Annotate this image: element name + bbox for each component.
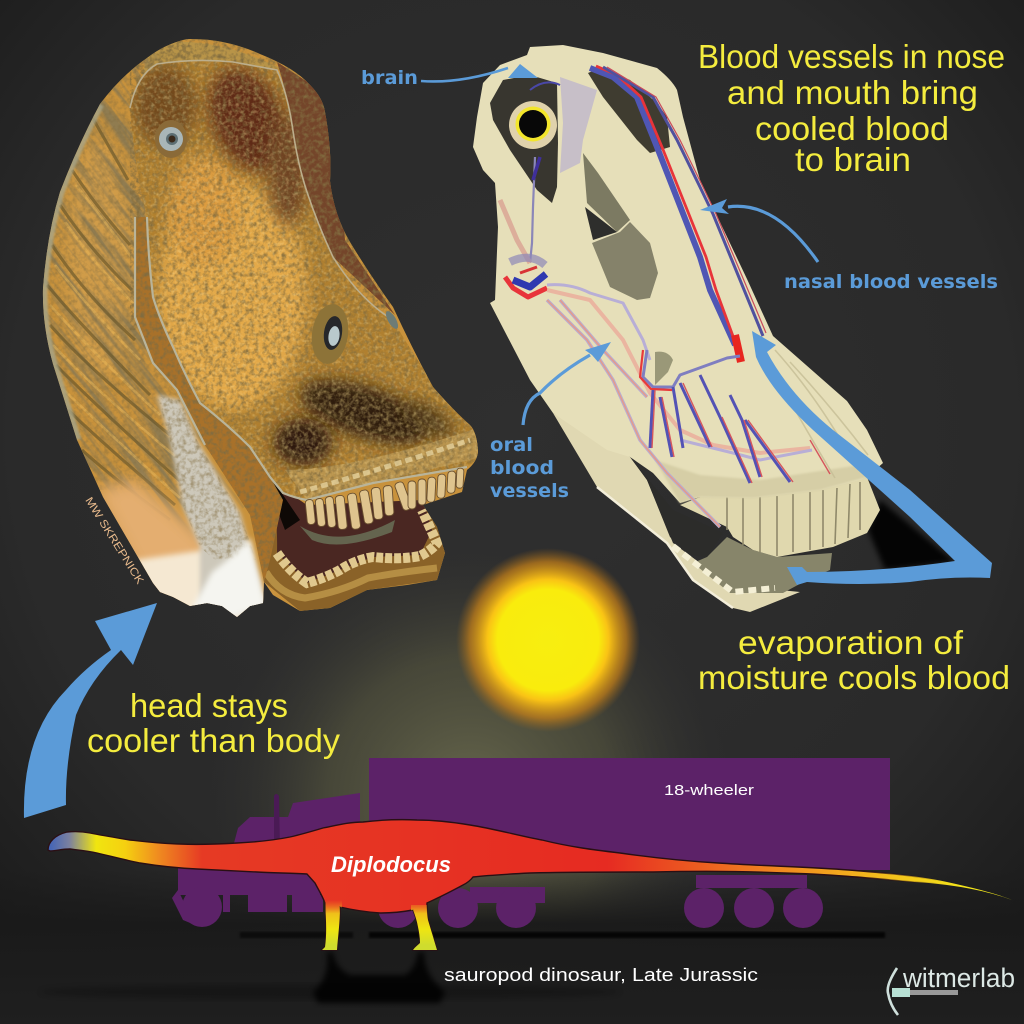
arrow: nasal blood vessels bbox=[700, 199, 818, 262]
pale lower neck bbox=[95, 480, 265, 625]
label: evaporation: evaporation of bbox=[738, 624, 964, 661]
label: oral blood vessels: blood bbox=[490, 457, 554, 479]
nasal opening bbox=[588, 68, 670, 153]
skull cranium bbox=[473, 45, 883, 503]
icon: head nostril bbox=[308, 302, 400, 366]
label: Diplodocus: Diplodocus bbox=[331, 852, 451, 877]
label: oral blood vessels: oral bbox=[490, 434, 533, 456]
artist signature: MW SKREPNICK bbox=[82, 495, 146, 587]
cab bbox=[234, 793, 360, 870]
antorbital openings bbox=[583, 153, 630, 232]
arrow: brain bbox=[421, 64, 538, 81]
illustration: skull with blood vessels bbox=[473, 45, 955, 612]
upper teeth bbox=[305, 468, 464, 530]
sun bbox=[456, 548, 640, 732]
lavender bone patch bbox=[560, 77, 597, 173]
heading: blood vessels: cooled blood bbox=[755, 110, 949, 147]
label: nasal blood vessels: nasal blood vessels bbox=[784, 271, 998, 293]
label: brain: brain bbox=[361, 67, 418, 89]
wheels bbox=[172, 887, 823, 928]
ground shadows bbox=[40, 932, 885, 1003]
trailer bbox=[369, 758, 890, 870]
illustration: Diplodocus head life restoration bbox=[42, 39, 478, 617]
label: 18-wheeler: 18-wheeler bbox=[664, 782, 754, 799]
heading: blood vessels: to brain bbox=[795, 141, 911, 178]
lower jaw bbox=[553, 413, 800, 612]
shadow behind snout bbox=[868, 500, 955, 570]
white throat bbox=[157, 395, 263, 612]
jaw strip below the face plate bbox=[136, 217, 283, 582]
nasal blood vessels bbox=[500, 66, 766, 362]
label: sauropod dinosaur: sauropod dinosaur, Late Jurassic bbox=[444, 965, 758, 985]
arrow: head stays cooler bbox=[24, 603, 157, 818]
face plate bbox=[130, 61, 478, 499]
arrow: oral blood vessels bbox=[523, 342, 611, 425]
dinosaur silhouette: Diplodocus bbox=[48, 820, 1012, 955]
plate outlines bbox=[130, 60, 393, 320]
orbit opening bbox=[490, 75, 558, 203]
label: oral blood vessels: vessels bbox=[490, 480, 569, 502]
icon: skull eye bbox=[509, 101, 557, 149]
lower jaw and mouth bbox=[264, 511, 445, 611]
icon: head eye bbox=[155, 120, 187, 158]
heading: blood vessels: Blood vessels in nose bbox=[698, 38, 1005, 75]
premaxillary notch bbox=[655, 352, 673, 385]
label: evaporation: moisture cools blood bbox=[698, 659, 1010, 696]
truck: 18-wheeler bbox=[172, 758, 890, 928]
upper teeth on skull bbox=[680, 477, 880, 557]
logo: witmerlab: witmerlab bbox=[902, 963, 1015, 993]
label: head stays cooler: cooler than body bbox=[87, 722, 341, 759]
label: head stays cooler: head stays bbox=[130, 687, 288, 724]
arrow: big evaporation V bbox=[752, 331, 992, 585]
chassis bbox=[223, 895, 230, 912]
heading: blood vessels: and mouth bring bbox=[727, 74, 978, 111]
oral blood vessels bbox=[505, 258, 830, 527]
logo: witmerlab bbox=[888, 963, 1015, 1015]
pale left rim of neck bbox=[43, 104, 100, 440]
